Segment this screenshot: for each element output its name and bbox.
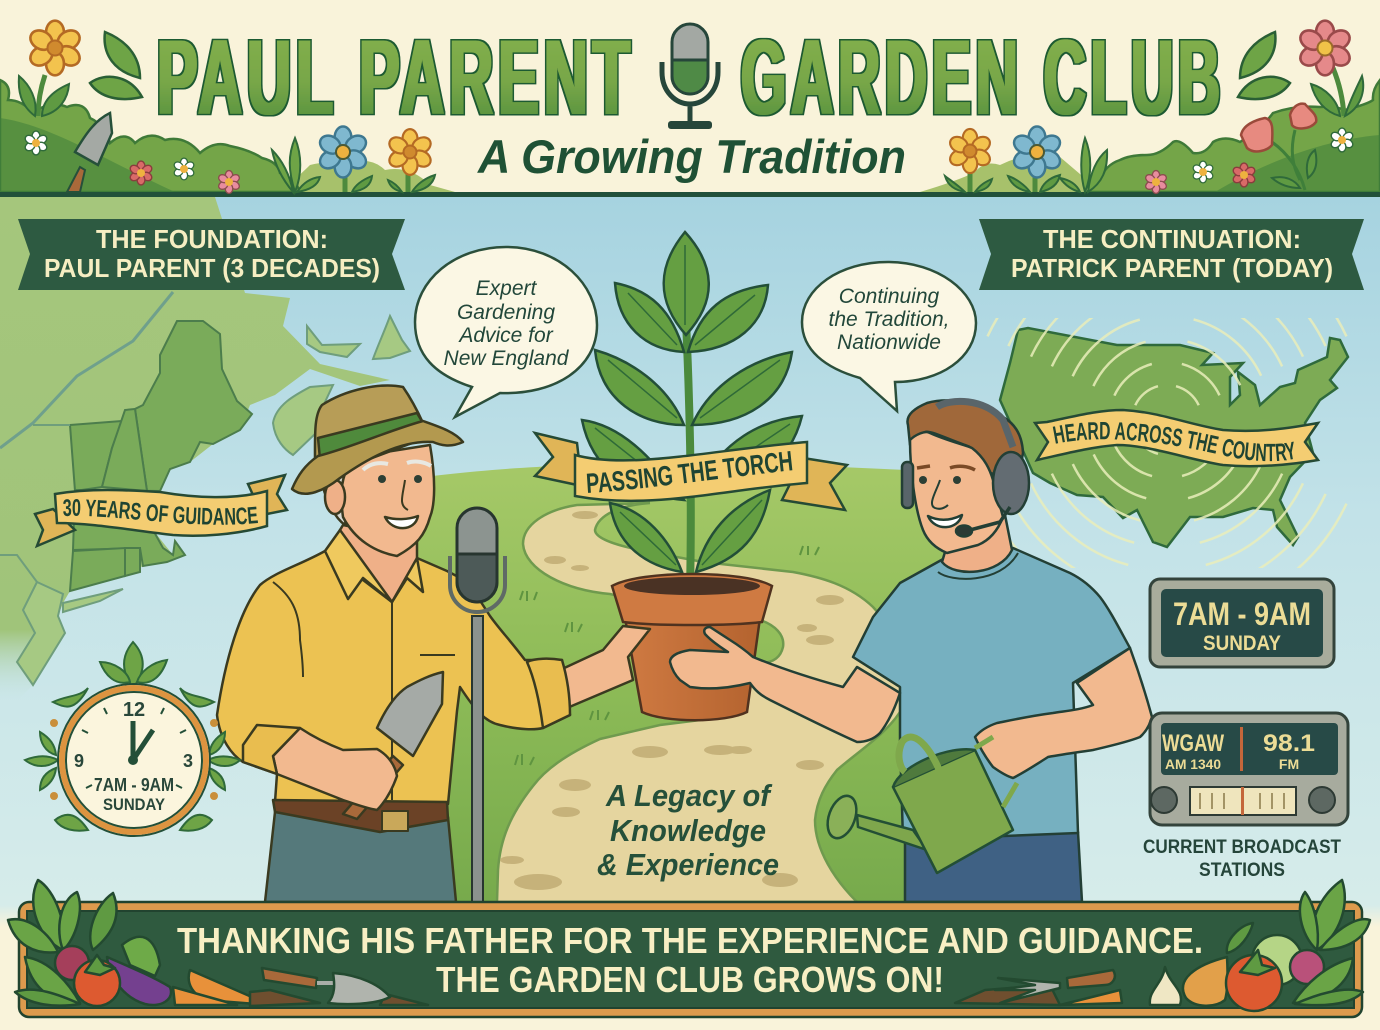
radio: current stations bbox=[1150, 713, 1348, 825]
clock with wreath: SUNDAY bbox=[103, 795, 166, 814]
plant in pot bbox=[582, 232, 802, 720]
speech bubble: expert advice: Advice for bbox=[457, 324, 554, 347]
left forearm and hand bbox=[273, 728, 397, 810]
right earcup bbox=[993, 452, 1029, 514]
trowel handle bbox=[343, 756, 403, 819]
left foliage bbox=[0, 80, 300, 192]
ribbon: heard across the country: HEARD ACROSS THE COUNTRY bbox=[1052, 422, 1294, 462]
speech bubble: continuing tradition: Continuing bbox=[839, 285, 940, 308]
speech bubble: expert advice: Expert bbox=[476, 277, 538, 300]
speech bubble: continuing tradition: Nationwide bbox=[837, 331, 941, 354]
caption: current broadcast stations: CURRENT BROADCAST bbox=[1143, 837, 1341, 858]
banner: the foundation: THE FOUNDATION: bbox=[96, 224, 328, 254]
speech bubble: expert advice bbox=[415, 247, 597, 417]
caption: a legacy of knowledge: & Experience bbox=[597, 847, 779, 882]
right arm and hand bbox=[560, 626, 650, 708]
foliage shading bbox=[0, 118, 1380, 192]
smile bbox=[928, 515, 962, 527]
smile bbox=[385, 516, 418, 528]
mic boom bbox=[970, 507, 1010, 530]
ribbon: 30 years of guidance bbox=[33, 473, 289, 548]
map: New England bbox=[0, 197, 410, 700]
radio: current stations: 98.1 bbox=[1263, 730, 1315, 757]
jeans bbox=[905, 832, 1082, 902]
ribbon: 30 years of guidance: 30 YEARS OF GUIDANCE bbox=[63, 499, 258, 525]
banner: the foundation: PAUL PARENT (3 DECADES) bbox=[44, 253, 380, 283]
hat band bbox=[318, 413, 423, 459]
digital time display: SUNDAY bbox=[1203, 632, 1281, 655]
ribbon: passing the torch bbox=[532, 431, 850, 512]
caption: current broadcast stations bbox=[1143, 837, 1341, 881]
caption: a legacy of knowledge: Knowledge bbox=[610, 813, 766, 848]
speech bubble: continuing tradition: the Tradition, bbox=[828, 308, 950, 331]
icon: title microphone bbox=[662, 24, 718, 129]
nose bbox=[932, 480, 948, 509]
icon: right header flowers bbox=[945, 21, 1363, 193]
sleeve hem bbox=[853, 657, 900, 687]
trowel blade bbox=[377, 672, 443, 756]
header panel bbox=[0, 0, 1380, 197]
banner: the continuation: PATRICK PARENT (TODAY) bbox=[1011, 253, 1333, 283]
pot bbox=[625, 618, 760, 720]
figure: Patrick Parent bbox=[670, 400, 1152, 902]
brows and eyes bbox=[917, 466, 975, 470]
digital time display: 7AM - 9AM bbox=[1173, 596, 1311, 632]
collar bbox=[938, 553, 1018, 579]
clock with wreath bbox=[25, 642, 240, 836]
map: United States with radio waves bbox=[986, 318, 1350, 568]
title: PAUL PARENT bbox=[157, 17, 635, 137]
caption: current broadcast stations: STATIONS bbox=[1199, 860, 1285, 881]
banner: the foundation bbox=[18, 219, 405, 290]
figure: Paul Parent bbox=[217, 386, 650, 902]
clock with wreath: 3 bbox=[183, 751, 193, 771]
footer banner bbox=[19, 902, 1362, 1017]
face bbox=[341, 445, 434, 556]
subtitle: A Growing Tradition bbox=[477, 130, 906, 183]
hat crown bbox=[315, 386, 423, 470]
clock with wreath: 12 bbox=[123, 699, 145, 721]
caption: a legacy of knowledge bbox=[597, 778, 779, 882]
neck bbox=[340, 525, 417, 602]
radio: current stations: WGAW bbox=[1162, 730, 1224, 757]
right foliage bbox=[1087, 80, 1380, 192]
vegetables left bbox=[8, 880, 428, 1006]
nose bbox=[402, 480, 408, 510]
belt bbox=[273, 800, 448, 832]
radio: current stations: AM 1340 bbox=[1165, 756, 1221, 772]
buckle bbox=[382, 811, 408, 831]
hair bbox=[320, 458, 355, 525]
trousers bbox=[265, 812, 456, 902]
ear bbox=[325, 480, 345, 514]
background sky bbox=[0, 197, 1380, 907]
winding garden path bbox=[497, 503, 903, 902]
garden hill bbox=[300, 462, 1000, 902]
ribbon: passing the torch: PASSING THE TORCH bbox=[586, 451, 792, 493]
studio microphone on stand bbox=[450, 508, 505, 902]
clock with wreath: 9 bbox=[74, 751, 84, 771]
speech bubble: expert advice: New England bbox=[444, 347, 570, 370]
speech bubble: continuing tradition bbox=[802, 262, 976, 411]
hat brim bbox=[292, 421, 463, 494]
arm to pot bbox=[670, 627, 900, 742]
vegetables right bbox=[955, 880, 1370, 1011]
footer banner: THANKING HIS FATHER FOR THE EXPERIENCE AND GUIDANCE. bbox=[177, 920, 1203, 961]
sleeve cuff bbox=[243, 725, 300, 774]
banner: the continuation: THE CONTINUATION: bbox=[1043, 224, 1301, 254]
caption: a legacy of knowledge: A Legacy of bbox=[605, 778, 773, 813]
speech bubble: expert advice: Gardening bbox=[457, 301, 555, 324]
digital time display bbox=[1150, 579, 1334, 667]
icon: header leaves bbox=[90, 32, 1290, 99]
radio: current stations: FM bbox=[1279, 756, 1299, 772]
face bbox=[910, 432, 1003, 553]
right cuff bbox=[527, 659, 570, 728]
arm holding can bbox=[975, 648, 1152, 778]
neck bbox=[942, 515, 1012, 572]
watering can bbox=[822, 737, 1017, 873]
collar bbox=[325, 530, 423, 602]
pale back bushes bbox=[280, 155, 1100, 192]
t-shirt bbox=[853, 548, 1130, 840]
icon: left header flowers and trowel bbox=[19, 21, 435, 193]
headset band bbox=[937, 401, 1013, 447]
hair bbox=[907, 400, 1023, 480]
mic tip bbox=[956, 526, 972, 536]
banner: the continuation bbox=[979, 219, 1364, 290]
shirt bbox=[217, 551, 570, 804]
sleeve and placket lines bbox=[273, 582, 455, 800]
brows and eyes bbox=[363, 462, 431, 470]
header rule bbox=[0, 192, 1380, 197]
footer banner: THE GARDEN CLUB GROWS ON! bbox=[436, 959, 944, 1000]
left earcup bbox=[902, 462, 913, 508]
clock with wreath: 7AM - 9AM bbox=[94, 775, 174, 795]
sky fades into the cream page bbox=[0, 905, 1380, 927]
